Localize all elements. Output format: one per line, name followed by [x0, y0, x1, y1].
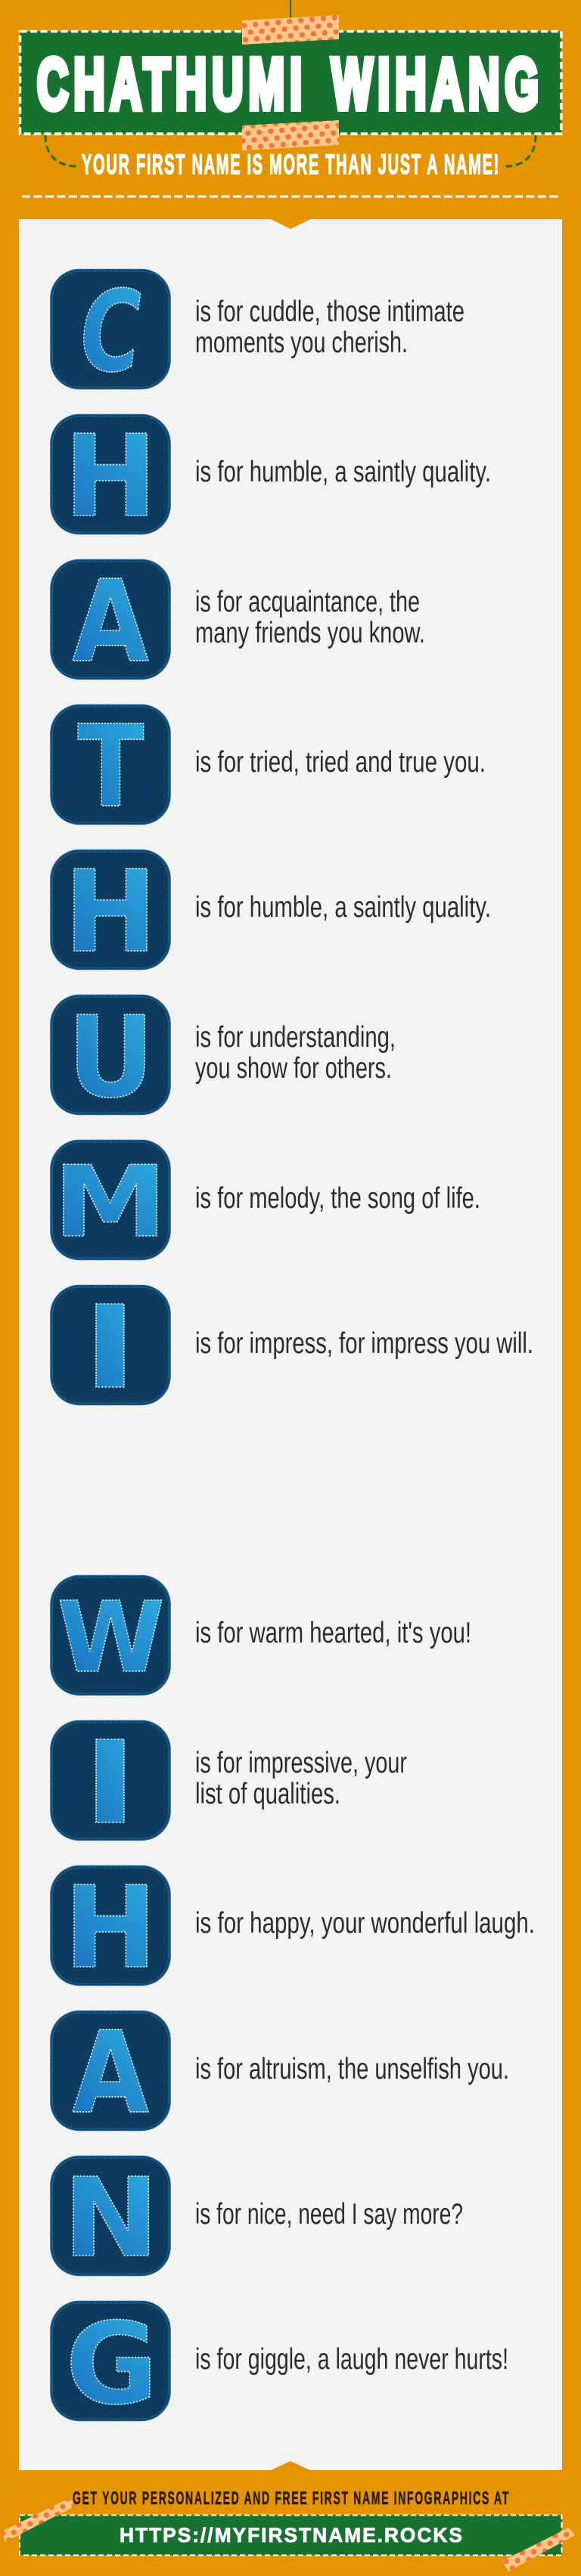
header — [20, 0, 561, 180]
description line 2: many friends you know. — [195, 617, 425, 649]
bottom notch — [269, 2461, 312, 2471]
letter U: U — [67, 992, 154, 1123]
letter H: H — [64, 410, 157, 542]
row I — [51, 1282, 533, 1414]
row U — [51, 992, 396, 1123]
hanging line — [290, 0, 291, 19]
description: is for acquaintance, the — [195, 586, 420, 618]
row N — [51, 2155, 463, 2281]
letter G: G — [66, 2299, 158, 2430]
letter M: M — [53, 1146, 167, 1259]
letter I: I — [82, 1717, 138, 1850]
row C — [51, 266, 464, 397]
letter W: W — [57, 1581, 165, 1695]
description line 2: you show for others. — [195, 1052, 392, 1085]
letter A: A — [72, 557, 149, 688]
row W — [51, 1575, 471, 1695]
row G — [51, 2299, 508, 2430]
letter I: I — [82, 1282, 138, 1414]
letter N: N — [63, 2155, 159, 2281]
description: is for warm hearted, it's you! — [195, 1617, 471, 1649]
description: is for cuddle, those intimate — [195, 296, 464, 328]
left bracket — [45, 135, 78, 166]
row H — [51, 410, 491, 542]
right bracket — [506, 135, 536, 166]
row M — [51, 1140, 480, 1259]
tape: right — [502, 2528, 575, 2571]
title banner — [20, 32, 561, 134]
tape: top — [242, 15, 339, 45]
letter H: H — [64, 846, 157, 977]
description: is for humble, a saintly quality. — [195, 891, 491, 924]
description: is for humble, a saintly quality. — [195, 456, 491, 488]
row I 2 — [51, 1717, 407, 1850]
description: is for impressive, your — [195, 1747, 407, 1779]
description: is for tried, tried and true you. — [195, 746, 486, 779]
letter A: A — [72, 2008, 149, 2139]
description: is for melody, the song of life. — [195, 1182, 480, 1215]
row A 2 — [51, 2008, 509, 2139]
row H 3 — [51, 1862, 535, 1993]
row T — [51, 701, 486, 832]
letter H: H — [64, 1862, 157, 1993]
description line 2: moments you cherish. — [195, 327, 408, 359]
footer banner — [20, 2516, 561, 2555]
description: is for nice, need I say more? — [195, 2198, 463, 2231]
url: HTTPS://MYFIRSTNAME.ROCKS — [120, 2524, 464, 2547]
letter C: C — [72, 266, 149, 397]
description line 2: list of qualities. — [195, 1778, 340, 1810]
top notch — [269, 218, 312, 229]
description: is for understanding, — [195, 1021, 396, 1054]
tape: bottom — [242, 120, 339, 150]
footer — [2, 2488, 575, 2571]
row H 2 — [51, 846, 491, 977]
letter T: T — [77, 701, 144, 832]
row A — [51, 557, 425, 688]
tape: left — [2, 2498, 76, 2542]
